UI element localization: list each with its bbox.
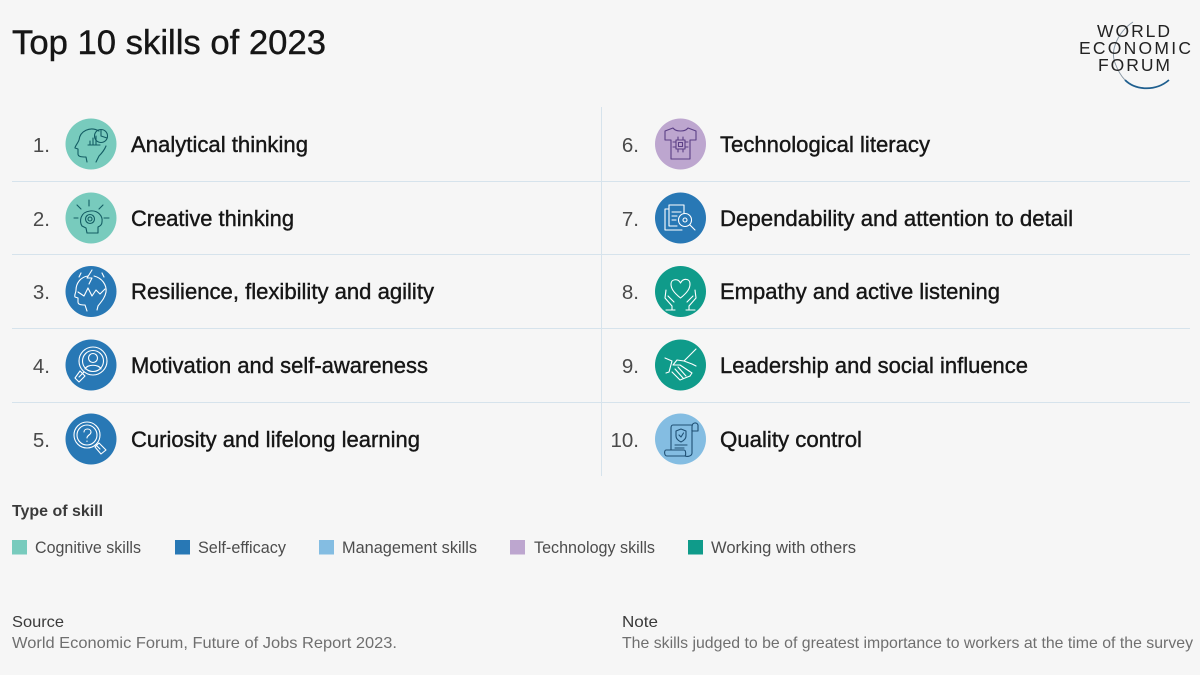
skill 2: Creative thinking [33, 192, 294, 244]
title: Top 10 skills of 2023 [12, 24, 326, 62]
skill 1: Analytical thinking: Analytical thinking [131, 132, 308, 157]
skill 4: Motivation and self-awareness: Motivation and self-awareness [131, 353, 428, 378]
logo: World Economic Forum: ECONOMIC [1079, 38, 1191, 58]
skill 6: Technological literacy: 6. [622, 134, 639, 157]
skill 1: Analytical thinking: 1. [33, 134, 50, 157]
skill 7: Dependability and attention to detail: Dependability and attention to detail [720, 206, 1073, 231]
logo: World Economic Forum: WORLD [1097, 21, 1170, 41]
skill 10: Quality control: Quality control [720, 427, 862, 452]
skill 6: Technological literacy: Technological literacy [720, 132, 930, 157]
skill 10: Quality control: 10. [610, 429, 639, 452]
skill 1: Analytical thinking [33, 118, 308, 170]
logo: World Economic Forum: FORUM [1098, 55, 1170, 75]
skill 5: Curiosity and lifelong learning: Curiosity and lifelong learning [131, 427, 420, 452]
note: Note [622, 614, 658, 631]
skill 9: Leadership and social influence [622, 340, 1028, 390]
skill 2: Creative thinking: Creative thinking [131, 206, 294, 231]
skill 5: Curiosity and lifelong learning [33, 414, 420, 464]
skill 4: Motivation and self-awareness [33, 340, 428, 390]
legend heading: Type of skill [12, 503, 103, 520]
skill 3: Resilience, flexibility and agility: Resilience, flexibility and agility [131, 279, 434, 304]
skill 7: Dependability and attention to detail [622, 192, 1073, 244]
legend item: self-efficacy: Self-efficacy [198, 539, 287, 557]
legend item: technology skills: Technology skills [534, 539, 655, 557]
skill 2: Creative thinking: 2. [33, 208, 50, 231]
skill 8: Empathy and active listening: 8. [622, 281, 639, 304]
skill 3: Resilience, flexibility and agility [33, 266, 434, 317]
skill 10: Quality control [610, 414, 862, 464]
note: The skills judged to be of greatest importance to workers at the time of the survey [622, 635, 1193, 652]
legend item: management skills: Management skills [342, 539, 477, 557]
skill 4: Motivation and self-awareness: 4. [33, 355, 50, 378]
skill 5: Curiosity and lifelong learning: 5. [33, 429, 50, 452]
skill 7: Dependability and attention to detail: 7. [622, 208, 639, 231]
skill 9: Leadership and social influence: 9. [622, 355, 639, 378]
legend item: working with others: Working with others [711, 539, 856, 557]
panel: skills 6 to 10 [610, 118, 1073, 464]
source [12, 614, 397, 652]
skill 8: Empathy and active listening: Empathy and active listening [720, 279, 1000, 304]
legend: type of skill [12, 503, 856, 557]
skill 8: Empathy and active listening [622, 266, 1000, 317]
skill 9: Leadership and social influence: Leadership and social influence [720, 353, 1028, 378]
source: World Economic Forum, Future of Jobs Report 2023. [12, 635, 397, 652]
note [622, 614, 1193, 652]
skill 6: Technological literacy [622, 118, 930, 170]
skill 3: Resilience, flexibility and agility: 3. [33, 281, 50, 304]
legend item: cognitive skills: Cognitive skills [35, 539, 141, 557]
panel: skills 1 to 5 [33, 118, 434, 464]
logo: World Economic Forum [1079, 21, 1191, 88]
source: Source [12, 614, 64, 631]
